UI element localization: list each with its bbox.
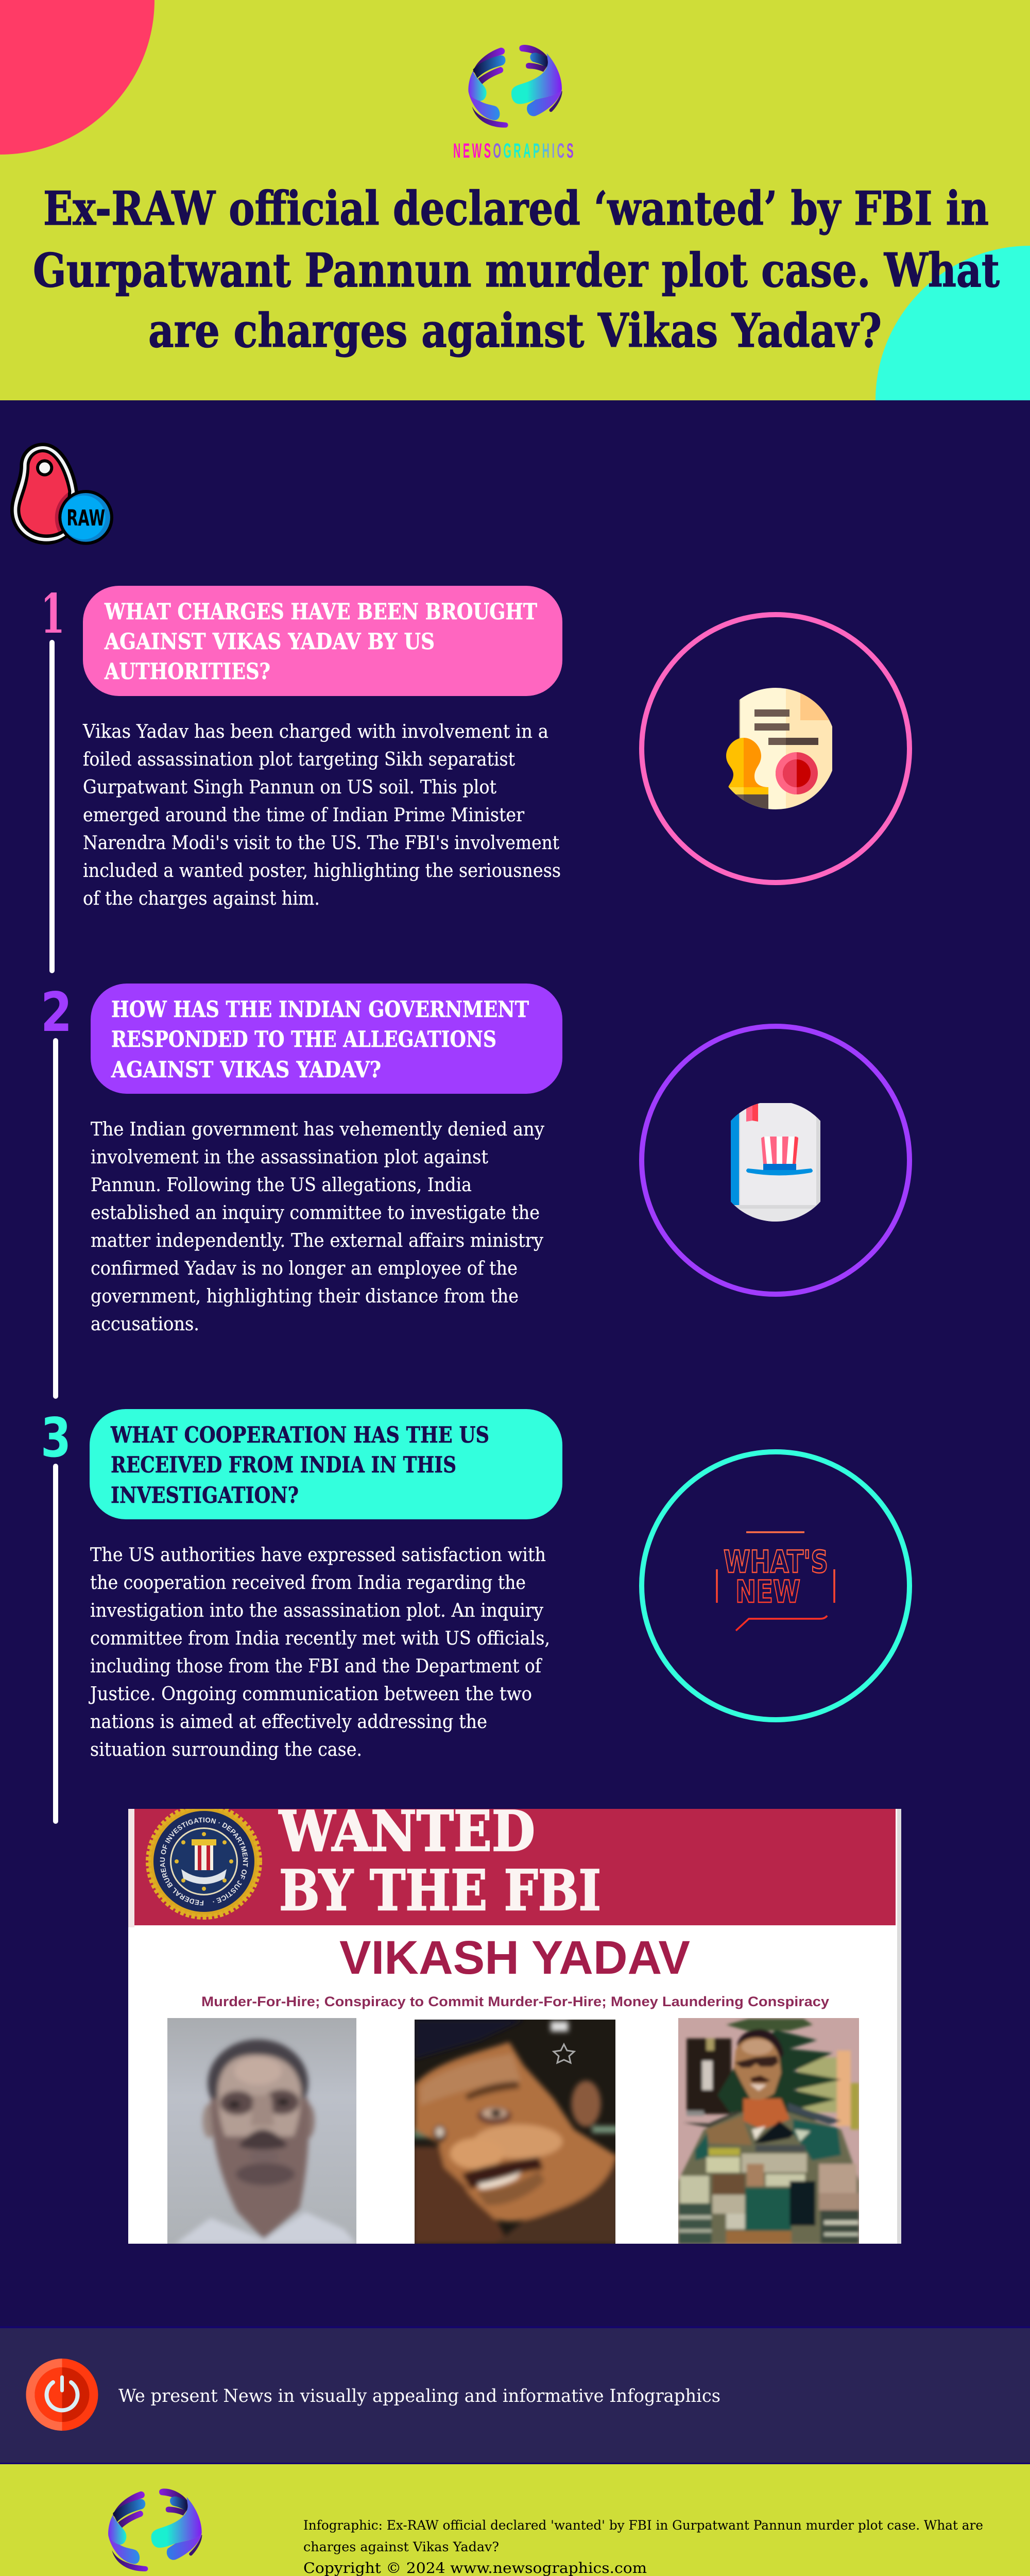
body text 3: including those from the FBI and the Department of [90,1656,542,1677]
heading pill 3: WHAT COOPERATION HAS THE US [110,1422,489,1448]
name: VIKASH YADAV [339,1931,690,1984]
body text 2: government, highlighting their distance from the [91,1286,519,1307]
decorative pink quarter circle [0,0,154,155]
heading pill 1: AUTHORITIES? [104,659,270,685]
footer credit text: charges against Vikas Yadav? [303,2539,499,2554]
wanted headline: BY THE FBI [279,1858,601,1923]
heading pill 3 [90,1409,562,1519]
body text 1: included a wanted poster, highlighting the seriousness [83,860,561,882]
decorative cyan quarter circle [876,246,1030,400]
header logo [453,45,576,162]
ring 1 [642,615,909,883]
heading pill 1 [83,586,562,696]
body text 2: The Indian government has vehemently denied any [91,1119,545,1140]
heading pill 2: RESPONDED TO THE ALLEGATIONS [111,1027,496,1053]
timeline bar 3 [53,1464,58,1824]
red banner [134,1806,896,1925]
body text 3: situation surrounding the case. [90,1739,362,1760]
icon: power button [26,2359,98,2431]
icon: what's new speech bubble [717,1532,834,1631]
wanted headline: WANTED [279,1799,535,1864]
body text 1: of the charges against him. [83,888,320,909]
heading pill 1: WHAT CHARGES HAVE BEEN BROUGHT [104,599,537,625]
heading pill 2 [91,984,562,1094]
body text 2: matter independently. The external affairs ministry [91,1230,544,1251]
icon: book with uncle sam hat [731,1097,820,1224]
photo: left portrait [167,2018,356,2244]
FBI seal [146,1809,262,1920]
body text 2: accusations. [91,1314,199,1335]
body text 1: emerged around the time of Indian Prime Minister [83,805,525,826]
footer panel [0,2464,1030,2576]
icon: document with stamp and seal [719,685,832,811]
body text 3: investigation into the assassination plot. An inquiry [90,1600,544,1621]
body text 1: Gurpatwant Singh Pannun on US soil. This plot [83,777,496,798]
body text 2: established an inquiry committee to investigate the [91,1202,540,1224]
number 1: 1 [41,582,65,646]
heading pill 1: AGAINST VIKAS YADAV BY US [104,629,435,655]
panel: section 2 government response [41,981,909,1399]
body text 3: committee from India recently met with US officials, [90,1628,550,1649]
body text 1: Narendra Modi's visit to the US. The FBI's involvement [83,833,559,854]
timeline bar 1 [49,640,55,973]
tagline: We present News in visually appealing and informative Infographics [118,2386,720,2406]
footer credit text: Infographic: Ex-RAW official declared 'wanted' by FBI in Gurpatwant Pannun murder plot case. What are [303,2518,983,2533]
icon: raw meat: RAW [66,505,105,531]
icon: what's new speech bubble: WHAT'S [724,1544,828,1580]
charges line: Murder-For-Hire; Conspiracy to Commit Murder-For-Hire; Money Laundering Conspiracy [201,1994,829,2009]
ring 2 [642,1026,909,1294]
body text 3: Justice. Ongoing communication between the two [88,1684,532,1705]
body text 3 [88,1545,550,1760]
body text 2: confirmed Yadav is no longer an employee of the [91,1258,518,1279]
heading pill 3: INVESTIGATION? [111,1483,299,1509]
wanted poster [128,1809,901,2244]
footer logo [93,2488,215,2576]
body text 2 [91,1119,545,1335]
body text 1: foiled assassination plot targeting Sikh separatist [83,749,515,770]
icon: what's new speech bubble: NEW [735,1574,800,1610]
panel: section 1 charges [41,582,909,973]
heading pill 2: HOW HAS THE INDIAN GOVERNMENT [111,997,529,1023]
body text 3: the cooperation received from India regarding the [90,1572,526,1594]
panel: section 3 cooperation [41,1406,909,1824]
star mark on photo [554,2044,574,2063]
FBI seal: FEDERAL BUREAU OF INVESTIGATION · DEPARTMENT OF JUSTICE · [160,1818,248,1905]
title [33,181,1000,358]
number 3: 3 [41,1406,71,1469]
timeline bar 2 [53,1038,58,1399]
wanted headline [278,1809,599,1910]
body text 3: nations is aimed at effectively addressing the [90,1711,487,1733]
number 2: 2 [41,981,72,1044]
body text 1 [82,721,561,909]
header panel [0,0,1030,400]
icon: raw meat [10,443,117,549]
heading pill 2: AGAINST VIKAS YADAV? [111,1057,381,1083]
body text 2: Pannun. Following the US allegations, India [91,1175,472,1196]
header panel: NEWSOGRAPHICS [453,140,576,162]
footer credit text [303,2518,983,2576]
body text 1: Vikas Yadav has been charged with involvement in a [82,721,548,742]
title: are charges against Vikas Yadav? [148,303,882,358]
footer band [0,2326,1030,2464]
body text 3: The US authorities have expressed satisfaction with [90,1545,546,1566]
photo: right portrait in uniform [678,2018,859,2245]
ring 3 [642,1452,909,1720]
photo: centre portrait [413,2020,619,2245]
body text 2: involvement in the assassination plot against [91,1147,488,1168]
heading pill 3: RECEIVED FROM INDIA IN THIS [111,1452,456,1478]
